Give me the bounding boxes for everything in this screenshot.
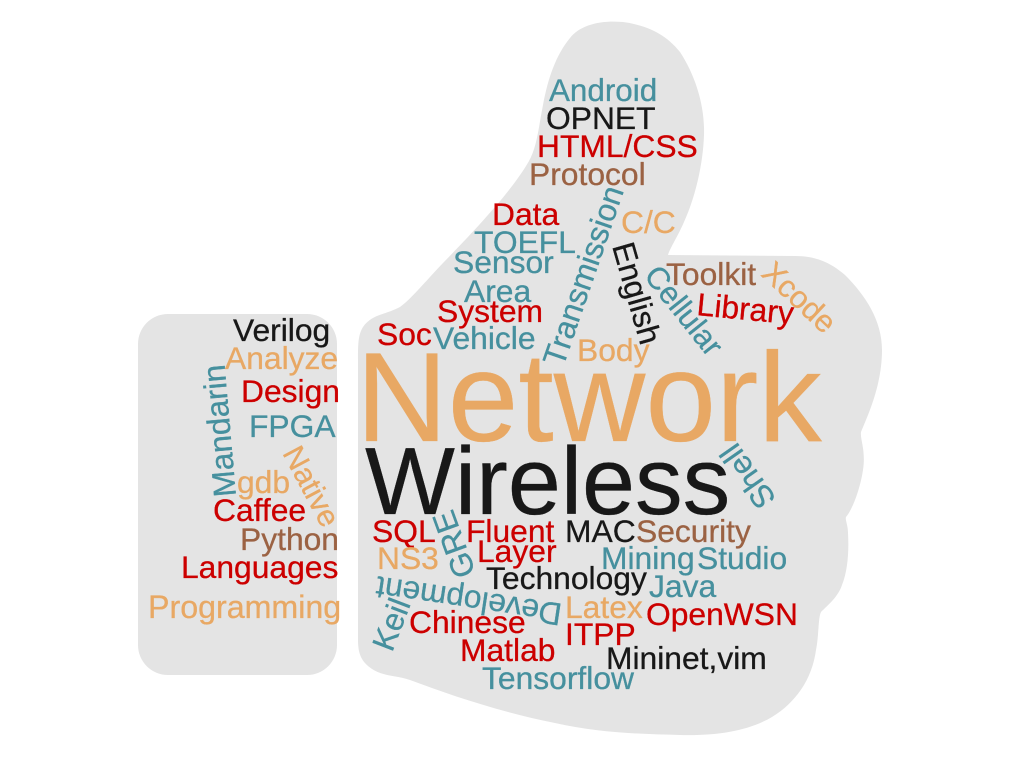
word: Latex: Latex [565, 589, 643, 625]
word: Network: Network [356, 326, 822, 468]
word: NS3: NS3 [377, 540, 439, 576]
word: ITPP: ITPP [565, 616, 636, 652]
word: SQL: SQL [372, 513, 436, 549]
word: Cellular: Cellular [638, 259, 730, 363]
word: Protocol: Protocol [529, 156, 646, 192]
words: hand lower [365, 437, 798, 696]
word: GRE: GRE [425, 506, 483, 583]
words: hand upper [377, 73, 843, 370]
word: OPNET: OPNET [546, 100, 656, 136]
word: Technology: Technology [486, 560, 647, 596]
word: Tensorflow: Tensorflow [482, 660, 635, 696]
word: Toolkit: Toolkit [666, 256, 756, 292]
words: left block [148, 312, 346, 625]
word: FPGA: FPGA [249, 408, 336, 444]
word: gdb: gdb [237, 464, 290, 500]
word: System: System [437, 293, 543, 329]
word: C/C: C/C [621, 204, 676, 240]
word: Mining: Mining [601, 540, 695, 576]
word: Android: Android [549, 73, 657, 108]
word: Chinese: Chinese [409, 604, 526, 640]
word: Java: Java [649, 568, 716, 604]
word: Sensor: Sensor [453, 244, 554, 280]
word: English: English [605, 238, 669, 348]
word: Matlab: Matlab [460, 632, 555, 668]
word: Programming: Programming [148, 589, 341, 625]
word: Mandarin: Mandarin [196, 363, 243, 499]
word: Layer: Layer [477, 533, 557, 569]
word: Library: Library [695, 286, 796, 331]
word: Security: Security [636, 513, 751, 549]
word: Wireless: Wireless [365, 429, 730, 535]
word: Development: Development [373, 569, 564, 633]
word: Analyze: Analyze [225, 340, 338, 376]
panel: thumb hand shape [358, 22, 882, 735]
word: Vehicle: Vehicle [433, 320, 536, 356]
word: Keil: Keil [365, 593, 418, 656]
word: Body: Body [577, 332, 650, 368]
word: Transmission: Transmission [536, 181, 631, 370]
word: Languages: Languages [181, 549, 338, 585]
word: Mininet,vim: Mininet,vim [606, 640, 767, 676]
word: HTML/CSS: HTML/CSS [537, 128, 698, 164]
word: Fluent: Fluent [466, 513, 555, 549]
word: Soc: Soc [377, 316, 432, 352]
word: TOEFL: TOEFL [474, 224, 576, 260]
word: OpenWSN: OpenWSN [646, 596, 798, 632]
word: Data: Data [492, 196, 559, 232]
word: Shell: Shell [713, 437, 783, 516]
word: Python: Python [240, 521, 339, 557]
word: MAC: MAC [565, 513, 636, 549]
word: Verilog: Verilog [233, 312, 330, 348]
word: Native: Native [276, 440, 346, 533]
word: Design: Design [241, 373, 340, 409]
word: Caffee: Caffee [213, 492, 306, 528]
panel: thumb sleeve block [138, 314, 337, 675]
word: Studio: Studio [697, 540, 787, 576]
word: Xcode: Xcode [755, 255, 843, 340]
word: Area: Area [464, 273, 531, 309]
